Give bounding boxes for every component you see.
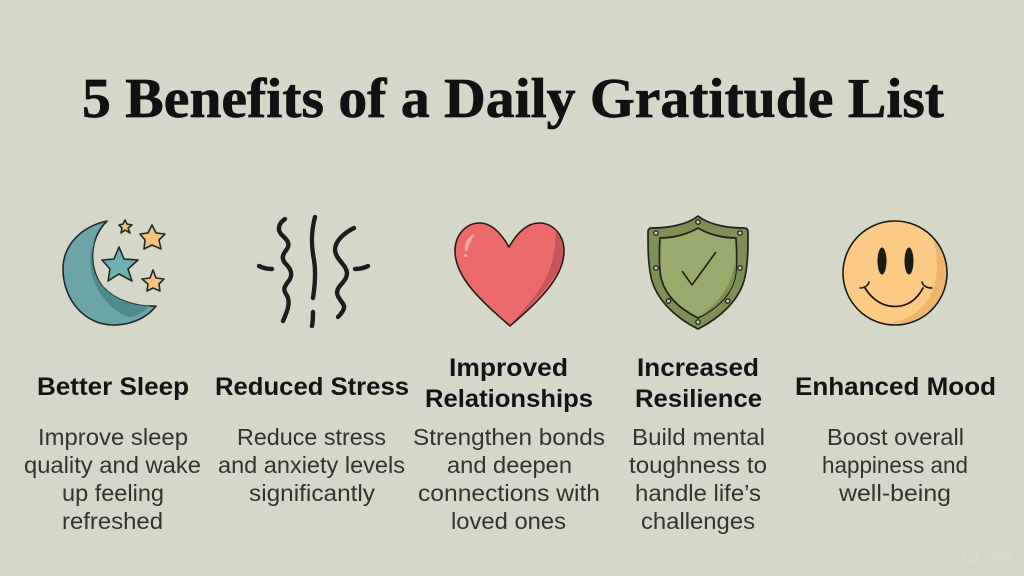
text: improved relationships description [413,424,605,534]
heading: improved relationships: Relationships [425,385,593,413]
text: better sleep description [24,424,201,534]
heading: increased resilience [635,354,762,413]
text: better sleep description: quality and wake [24,452,201,478]
heading: improved relationships: Improved [449,354,568,382]
text: improved relationships description: connections with [418,480,600,506]
heading: increased resilience: Increased [637,354,759,382]
text: better sleep description: refreshed [62,508,163,534]
text: enhanced mood description: Boost overall [827,424,964,450]
text: improved relationships description: loved ones [451,508,566,534]
text: increased resilience description: challenges [641,508,755,534]
heading: better sleep: Better Sleep [37,373,189,401]
text: reduced stress description: and anxiety levels [218,452,405,478]
icon: shield with check [648,216,748,329]
title: 5 Benefits of a Daily Gratitude List [82,68,944,130]
heading: reduced stress: Reduced Stress [215,373,409,401]
text: increased resilience description: Build mental [632,424,765,450]
panel: better sleep [24,220,201,534]
text: better sleep description: Improve sleep [38,424,188,450]
text: reduced stress description: Reduce stress [237,424,386,450]
heading: improved relationships [425,354,593,413]
text: reduced stress description: significantly [249,480,376,506]
text: enhanced mood description: well-being [838,480,951,506]
text: increased resilience description [629,424,767,534]
icon: crescent moon and stars [63,220,165,325]
text: increased resilience description: handle life’s [635,480,761,506]
icon: stress squiggles [259,217,368,326]
text: increased resilience description: toughness to [629,452,767,478]
heading: enhanced mood: Enhanced Mood [795,373,996,401]
text: reduced stress description [218,424,405,506]
watermark: Grok: Grok [985,548,1014,563]
panel: improved relationships [413,223,605,534]
text: enhanced mood description: happiness and [822,452,968,478]
panel: reduced stress [215,217,409,506]
icon: heart [455,223,564,326]
text: better sleep description: up feeling [62,480,164,506]
text: enhanced mood description [822,424,968,506]
text: improved relationships description: Strengthen bonds [413,424,605,450]
watermark: Grok [964,548,1014,563]
text: improved relationships description: and deepen [447,452,572,478]
heading: increased resilience: Resilience [635,385,762,413]
icon: smiley face [843,221,947,325]
panel: enhanced mood [795,221,996,506]
panel: increased resilience [629,216,767,534]
